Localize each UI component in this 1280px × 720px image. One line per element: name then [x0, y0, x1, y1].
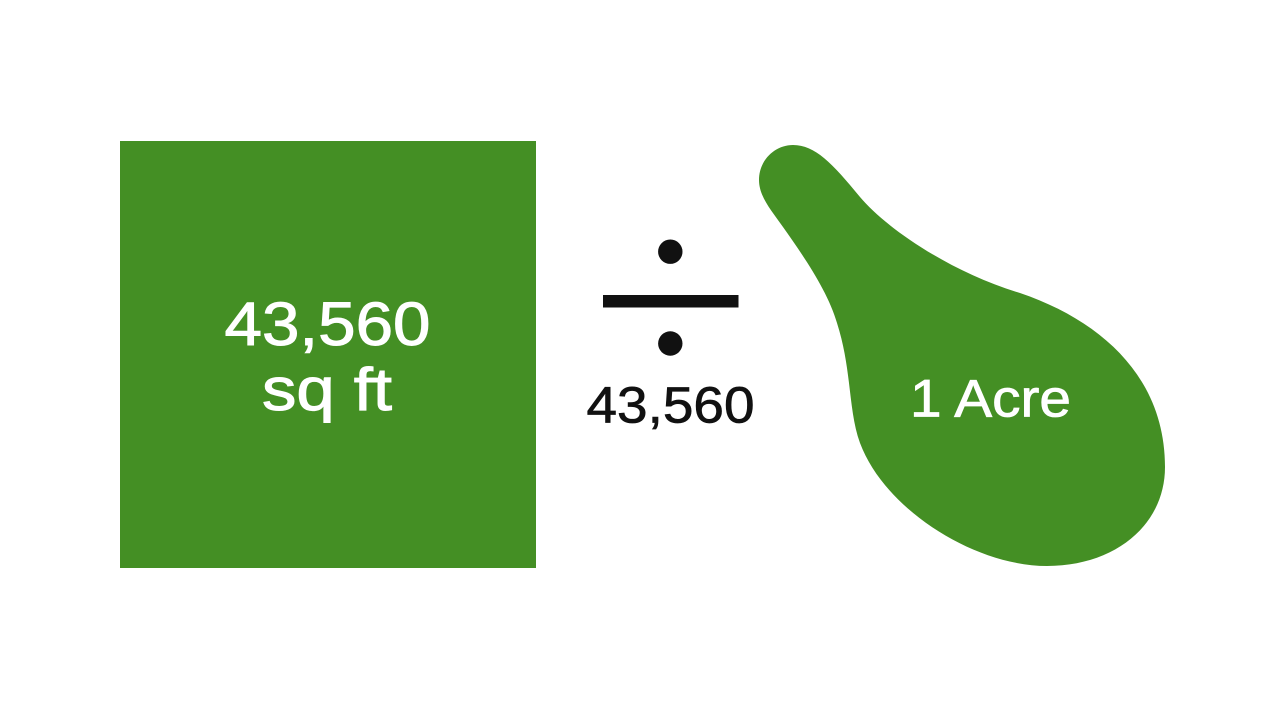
panel: green square 43,560 sq ft [120, 141, 536, 568]
square label: sq ft [262, 356, 392, 423]
square label: 43,560 [224, 290, 430, 358]
square label [224, 290, 430, 423]
icon: division sign [603, 240, 738, 356]
blob label: 1 Acre [910, 370, 1071, 428]
divisor text: 43,560 [586, 376, 754, 434]
panel: green acre blob [759, 145, 1165, 566]
